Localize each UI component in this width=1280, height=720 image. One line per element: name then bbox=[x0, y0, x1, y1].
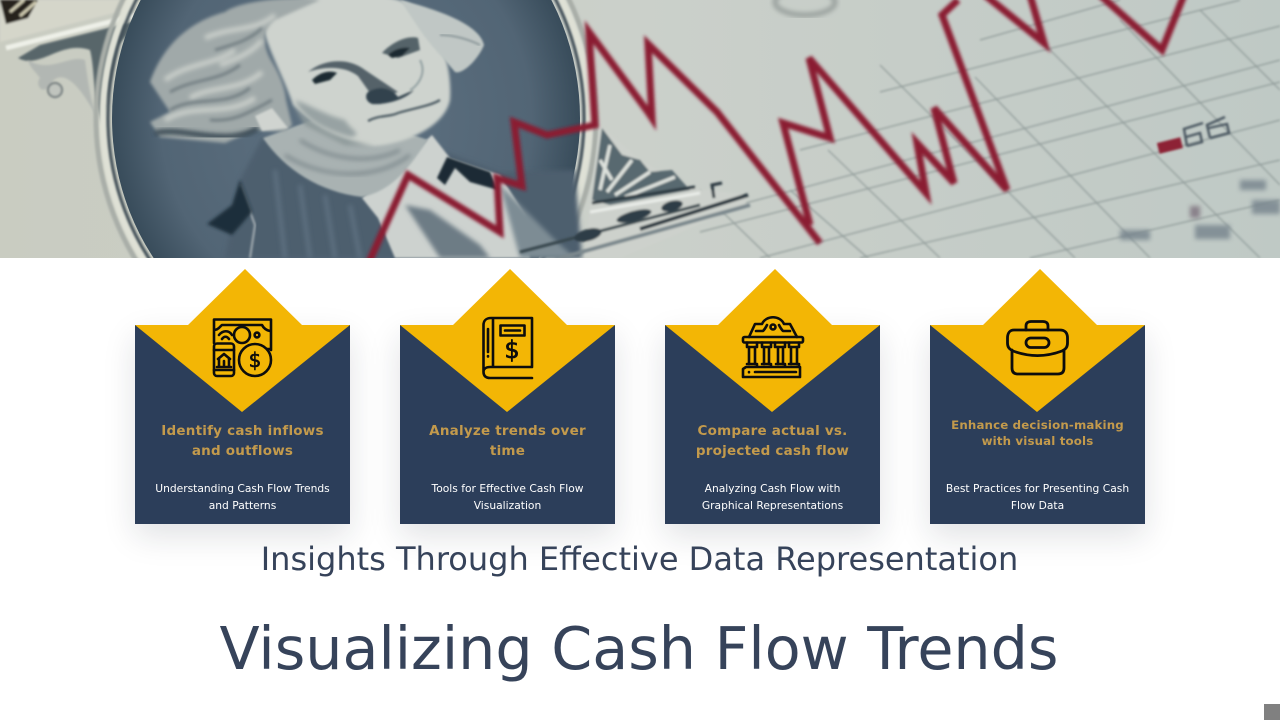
heading: time bbox=[490, 442, 525, 458]
heading: Compare actual vs. bbox=[697, 422, 848, 438]
icon: bank building bbox=[743, 317, 803, 377]
description: and Patterns bbox=[209, 499, 276, 512]
description: Graphical Representations bbox=[702, 499, 843, 512]
card 4: enhance decision-making with visual tools bbox=[920, 269, 1155, 546]
chart legend marker and small labels bbox=[1157, 117, 1229, 154]
portrait face details bbox=[308, 37, 440, 121]
icon: banknote, phone and coin bbox=[214, 320, 271, 376]
description: Tools for Effective Cash Flow bbox=[432, 482, 584, 495]
description bbox=[155, 482, 330, 512]
title: Visualizing Cash Flow Trends bbox=[220, 615, 1058, 683]
card 1: identify cash inflows and outflows bbox=[125, 269, 360, 546]
heading: and outflows bbox=[192, 442, 293, 458]
ornament top left of bill bbox=[0, 0, 165, 125]
heading bbox=[951, 418, 1124, 448]
heading: Enhance decision-making bbox=[951, 418, 1124, 432]
corner marker bbox=[1264, 704, 1280, 720]
grid lines on chart paper bbox=[690, 0, 1280, 258]
heading bbox=[429, 422, 586, 458]
icon: ledger book bbox=[484, 318, 532, 378]
red trend line bbox=[369, 0, 1184, 262]
description: Analyzing Cash Flow with bbox=[705, 482, 840, 495]
portrait oval with frame rings bbox=[96, 0, 596, 380]
card 3: compare actual vs projected cash flow bbox=[655, 269, 890, 546]
description: Understanding Cash Flow Trends bbox=[155, 482, 330, 495]
description bbox=[431, 482, 584, 512]
description bbox=[702, 482, 843, 512]
icon: briefcase bbox=[1008, 322, 1068, 374]
heading bbox=[161, 422, 324, 458]
description: Visualization bbox=[474, 499, 541, 512]
description: Flow Data bbox=[1011, 499, 1064, 512]
card 2: analyze trends over time bbox=[390, 269, 625, 546]
heading bbox=[696, 422, 849, 458]
heading: Identify cash inflows bbox=[161, 422, 324, 438]
portrait figure: coat, shirt, neck, hair and face bbox=[150, 0, 582, 258]
description bbox=[946, 482, 1129, 512]
heading: Analyze trends over bbox=[429, 422, 586, 438]
description: Best Practices for Presenting Cash bbox=[946, 482, 1129, 495]
icon: ledger book: $ bbox=[504, 336, 520, 364]
icon: banknote, phone and coin: $ bbox=[249, 348, 261, 372]
laurel ornament and bill edge at right of oval bbox=[520, 125, 750, 258]
heading: projected cash flow bbox=[696, 442, 849, 458]
subtitle: Insights Through Effective Data Representation bbox=[261, 540, 1018, 578]
hero photo: dollar bill with red trend line bbox=[0, 0, 1280, 258]
heading: with visual tools bbox=[982, 434, 1093, 448]
